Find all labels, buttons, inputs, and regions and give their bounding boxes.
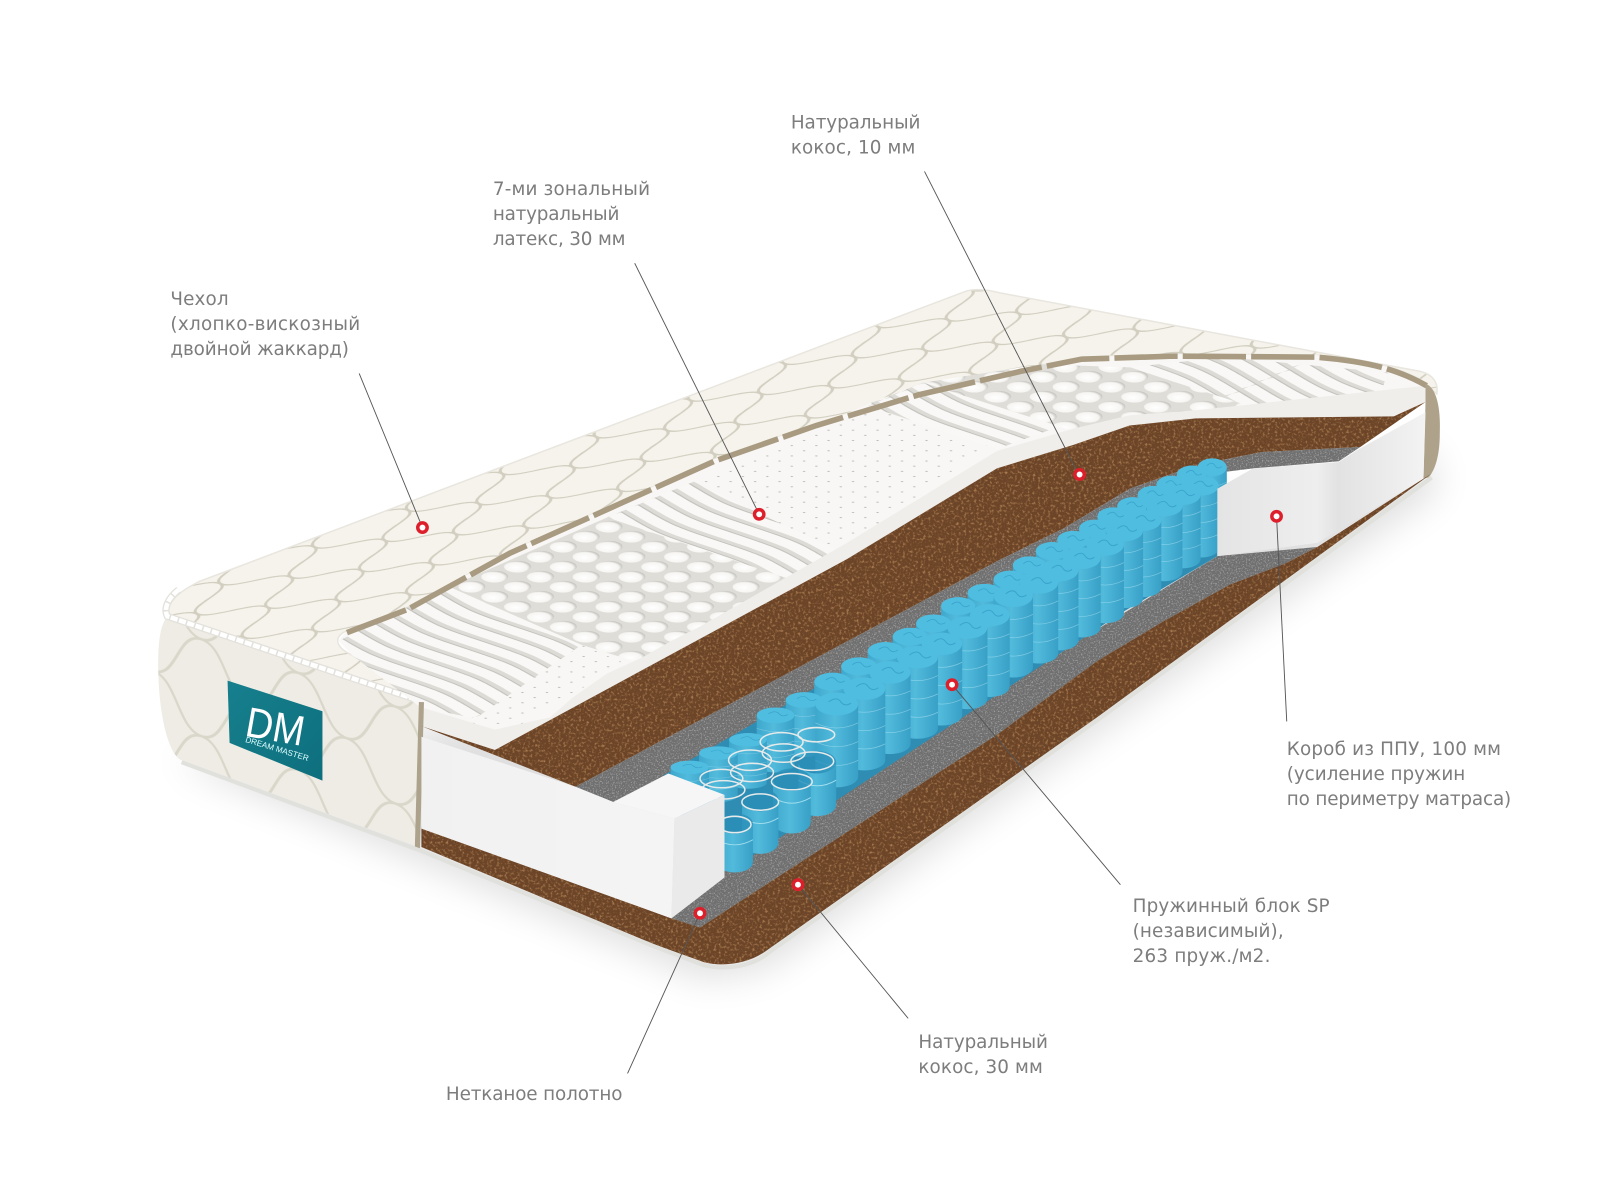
spring block: [663, 458, 1227, 872]
rope edging: [166, 590, 423, 702]
label: foam box: (усиление пружин: [1287, 764, 1465, 785]
label: latex: натуральный: [493, 204, 619, 225]
foam box far end: [1217, 412, 1426, 556]
quilted top cover: [168, 290, 1437, 702]
mattress illustration: [158, 290, 1440, 967]
zone: waves 2: [607, 482, 840, 580]
latex front edge: [420, 386, 1426, 750]
label: coconut 30 mm: кокос, 30 мм: [918, 1057, 1043, 1078]
lower felt layer: [671, 547, 1317, 928]
upper felt layer: [576, 447, 1360, 802]
bottom piping: [182, 478, 1432, 967]
zone: perforated flat: [694, 405, 997, 552]
zone: flat end: [469, 645, 624, 737]
right side felt: [1423, 384, 1440, 479]
opened springs: [716, 751, 836, 872]
label: spring block: Пружинный блок SP: [1133, 896, 1330, 917]
label: spring block: (независимый),: [1133, 921, 1284, 942]
zone: waves 3: [865, 383, 1082, 449]
label: foam box: по периметру матраса): [1287, 789, 1511, 810]
brand label: DM: [242, 699, 308, 755]
label: coconut 30 mm: Натуральный: [918, 1032, 1048, 1053]
marker dots: [418, 470, 1281, 918]
label: cover: двойной жаккард): [170, 339, 349, 360]
label: latex: латекс, 30 мм: [493, 229, 626, 250]
mattress shadow: [173, 449, 1439, 980]
zone: bubbles: [449, 515, 791, 663]
front row springs: [815, 476, 1219, 787]
spring backing: [663, 480, 1217, 867]
zone: waves 4: [1130, 357, 1388, 410]
label: nonwoven: Нетканое полотно: [446, 1084, 622, 1105]
cut felt edge of cover: [347, 356, 1427, 633]
upper coconut layer: [422, 402, 1426, 787]
label: coconut 10 mm: кокос, 10 мм: [791, 138, 915, 159]
foam box near end: [421, 737, 724, 918]
label: spring block: 263 пруж./м2.: [1133, 946, 1270, 967]
side fabric panel: [158, 615, 423, 847]
brand label: DREAM MASTER: [244, 735, 310, 763]
lower coconut layer: [421, 473, 1432, 964]
left cut felt edge: [417, 702, 421, 849]
label: coconut 10 mm: Натуральный: [791, 113, 920, 134]
label: cover: (хлопко-вискозный: [170, 314, 360, 335]
wire coils: [700, 728, 835, 833]
back row springs: [671, 458, 1227, 816]
zone: bubbles 2: [923, 364, 1262, 434]
leader lines: [359, 171, 1287, 1073]
latex layer: [339, 354, 1426, 750]
label: latex: 7-ми зональный: [493, 179, 650, 200]
latex base: [339, 354, 1426, 750]
zone: waves: [339, 587, 582, 719]
label: cover: Чехол: [170, 289, 229, 310]
label: foam box: Короб из ППУ, 100 мм: [1287, 739, 1501, 760]
brand label: [228, 681, 322, 781]
